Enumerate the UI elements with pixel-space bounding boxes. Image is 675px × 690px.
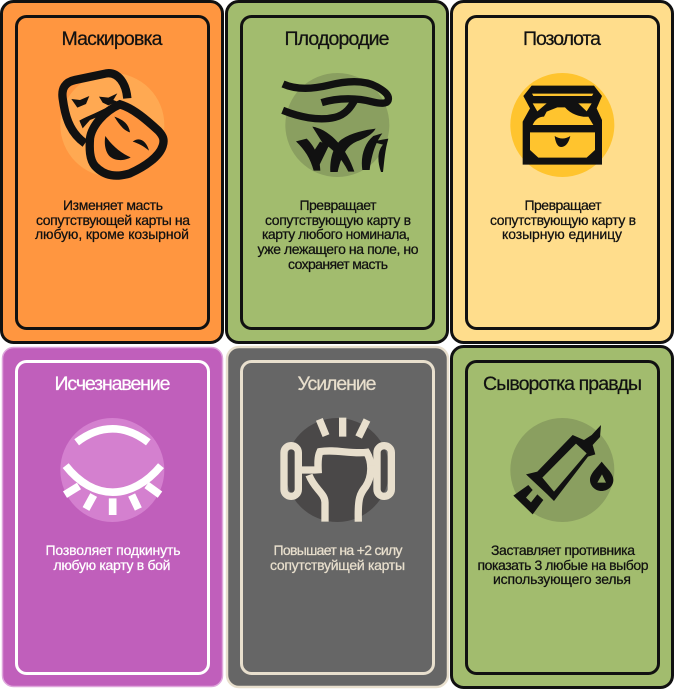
panel: Маскировка card [2, 2, 222, 342]
icon: closed eye [60, 418, 164, 522]
text: Плодородие description: уже лежащего на поле, но [258, 241, 419, 257]
text: Маскировка description [35, 197, 190, 242]
text: Сыворотка правды description: Заставляет противника [491, 542, 635, 558]
text: Исчезнавение description [46, 542, 180, 573]
text: Позолота description: козырную единицу [502, 226, 622, 242]
panel: Исчезнавение card [2, 348, 222, 686]
icon: syringe with drop [510, 418, 614, 522]
text: Усиление description: сопутствуйщей карты [270, 557, 405, 573]
text: Позолота description: Превращает [524, 197, 602, 213]
heading: Плодородие: Плодородие [284, 28, 390, 50]
text: Усиление description [270, 542, 405, 573]
panel: Позолота card [452, 2, 672, 342]
panel: Плодородие card [226, 2, 448, 342]
icon: hand over grass [283, 73, 389, 177]
text: Позолота description [490, 197, 636, 242]
icon: fist with weights [284, 418, 391, 522]
text: Плодородие description: сопутствующую карту в [265, 212, 411, 228]
text: Плодородие description: сохраняет масть [288, 256, 388, 272]
heading: Маскировка: Маскировка [62, 28, 163, 50]
heading: Исчезнавение: Исчезнавение [54, 373, 170, 395]
panel: Усиление card [227, 347, 448, 687]
heading: Сыворотка правды: Сыворотка правды [483, 373, 642, 395]
text: Усиление description: Повышает на +2 силу [274, 542, 402, 558]
icon: treasure chest [510, 73, 614, 177]
text: Исчезнавение description: любую карту в бой [54, 557, 170, 573]
panel: Сыворотка правды card [452, 346, 672, 688]
text: Исчезнавение description: Позволяет подкинуть [46, 542, 180, 558]
text: Маскировка description: сопутствующей карты на [36, 212, 190, 228]
text: Сыворотка правды description [478, 542, 649, 587]
text: Сыворотка правды description: использующего зелья [493, 571, 631, 587]
text: Маскировка description: Изменяет масть [63, 197, 163, 213]
text: Сыворотка правды description: показать 3 любые на выбор [478, 557, 649, 573]
text: Плодородие description: карту любого номинала, [262, 226, 410, 242]
icon: theatre masks [60, 73, 164, 177]
text: Плодородие description [258, 197, 419, 272]
heading: Позолота: Позолота [523, 28, 601, 50]
text: Маскировка description: любую, кроме козырной [35, 226, 189, 242]
text: Позолота description: сопутствующую карту в [490, 212, 636, 228]
text: Плодородие description: Превращает [300, 197, 377, 213]
heading: Усиление: Усиление [298, 373, 376, 395]
